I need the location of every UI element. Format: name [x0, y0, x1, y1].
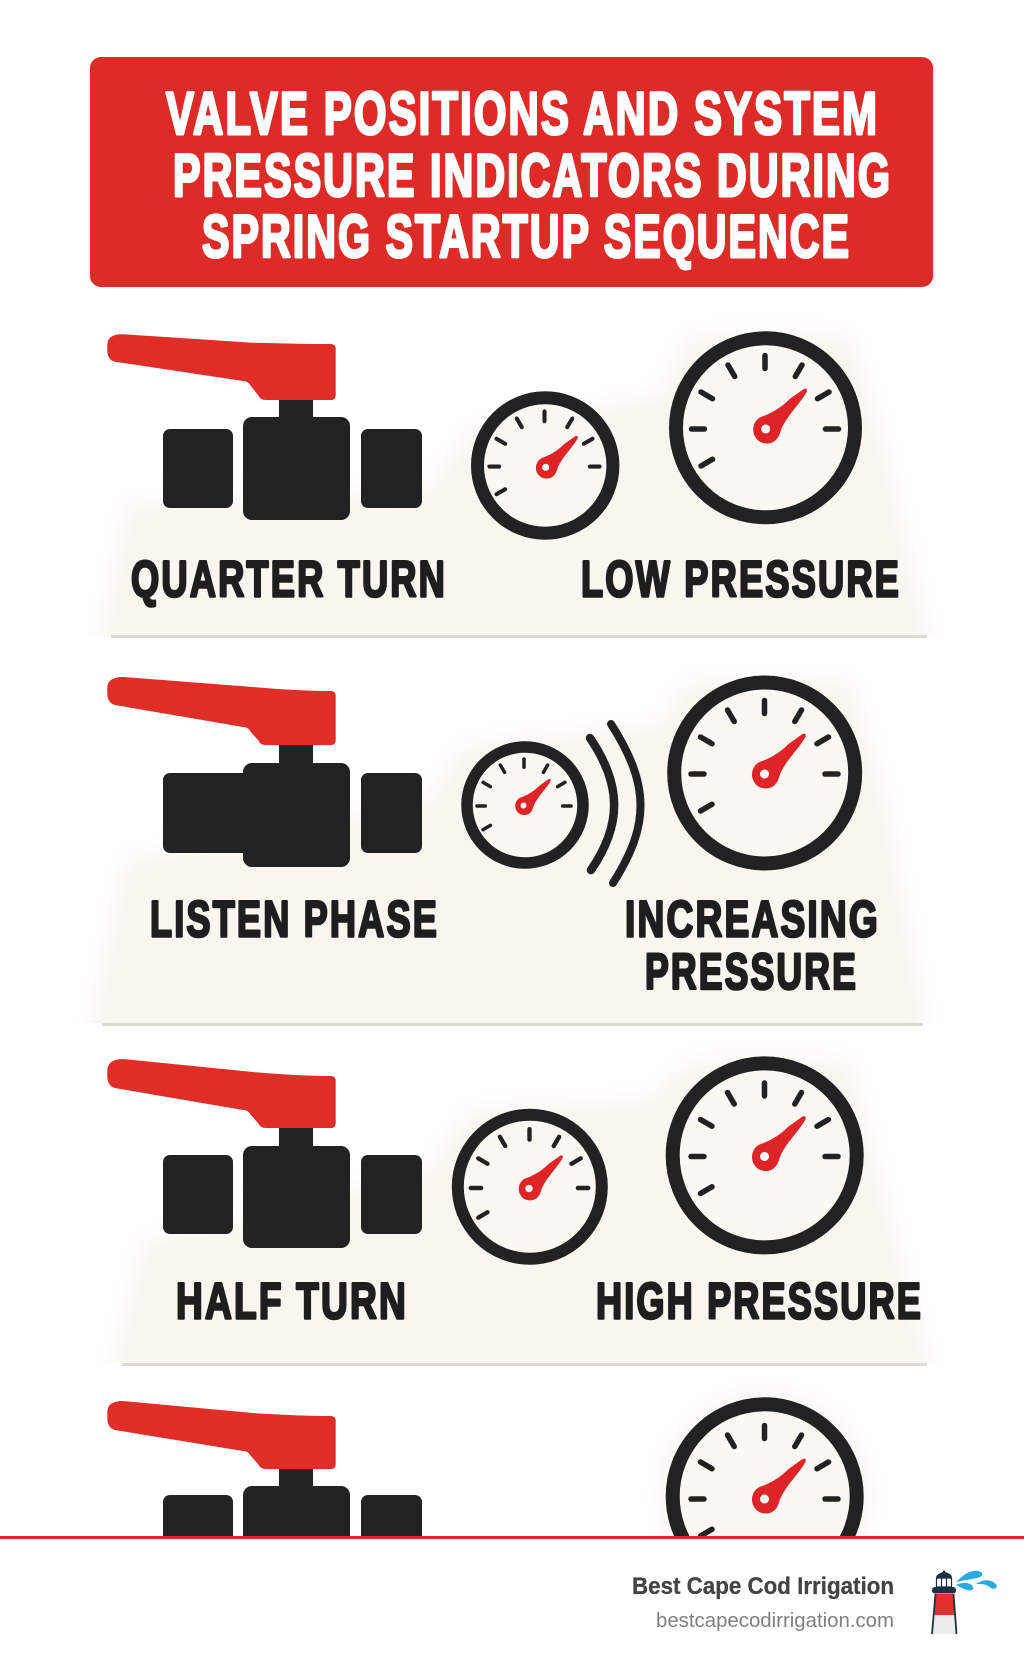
label: half turn: HALF TURN	[176, 1272, 408, 1330]
label: increasing pressure: PRESSURE	[645, 943, 858, 1000]
large gauge	[673, 1063, 857, 1247]
small gauge	[467, 747, 583, 863]
large gauge: cropped	[673, 1404, 857, 1588]
valve: half turn	[107, 1059, 422, 1248]
icon: lighthouse with water	[932, 1570, 997, 1634]
gauge halo	[661, 1392, 869, 1600]
footer	[0, 1536, 1024, 1666]
valve: cropped	[107, 1401, 422, 1556]
valve: quarter turn	[107, 334, 422, 520]
small gauge	[478, 398, 613, 533]
title banner	[90, 57, 933, 287]
footer url: bestcapecodirrigation.com	[656, 1609, 894, 1632]
valve: listen phase	[107, 677, 422, 867]
panel: listen phase, increasing pressure	[93, 676, 924, 1026]
small gauge	[458, 1115, 602, 1259]
label: low pressure: LOW PRESSURE	[581, 550, 901, 608]
panel: half turn, high pressure	[107, 1056, 927, 1366]
large gauge	[674, 682, 855, 864]
sound waves	[590, 724, 641, 883]
label: quarter turn: QUARTER TURN	[131, 550, 447, 608]
label: increasing pressure: INCREASING	[625, 890, 880, 948]
label: listen phase: LISTEN PHASE	[150, 890, 439, 948]
panel: quarter turn, low pressure	[103, 331, 927, 638]
label: increasing pressure	[625, 890, 880, 1000]
footer brand name: Best Cape Cod Irrigation	[632, 1573, 894, 1600]
large gauge	[676, 338, 855, 517]
panel: cropped final row	[107, 1392, 869, 1600]
